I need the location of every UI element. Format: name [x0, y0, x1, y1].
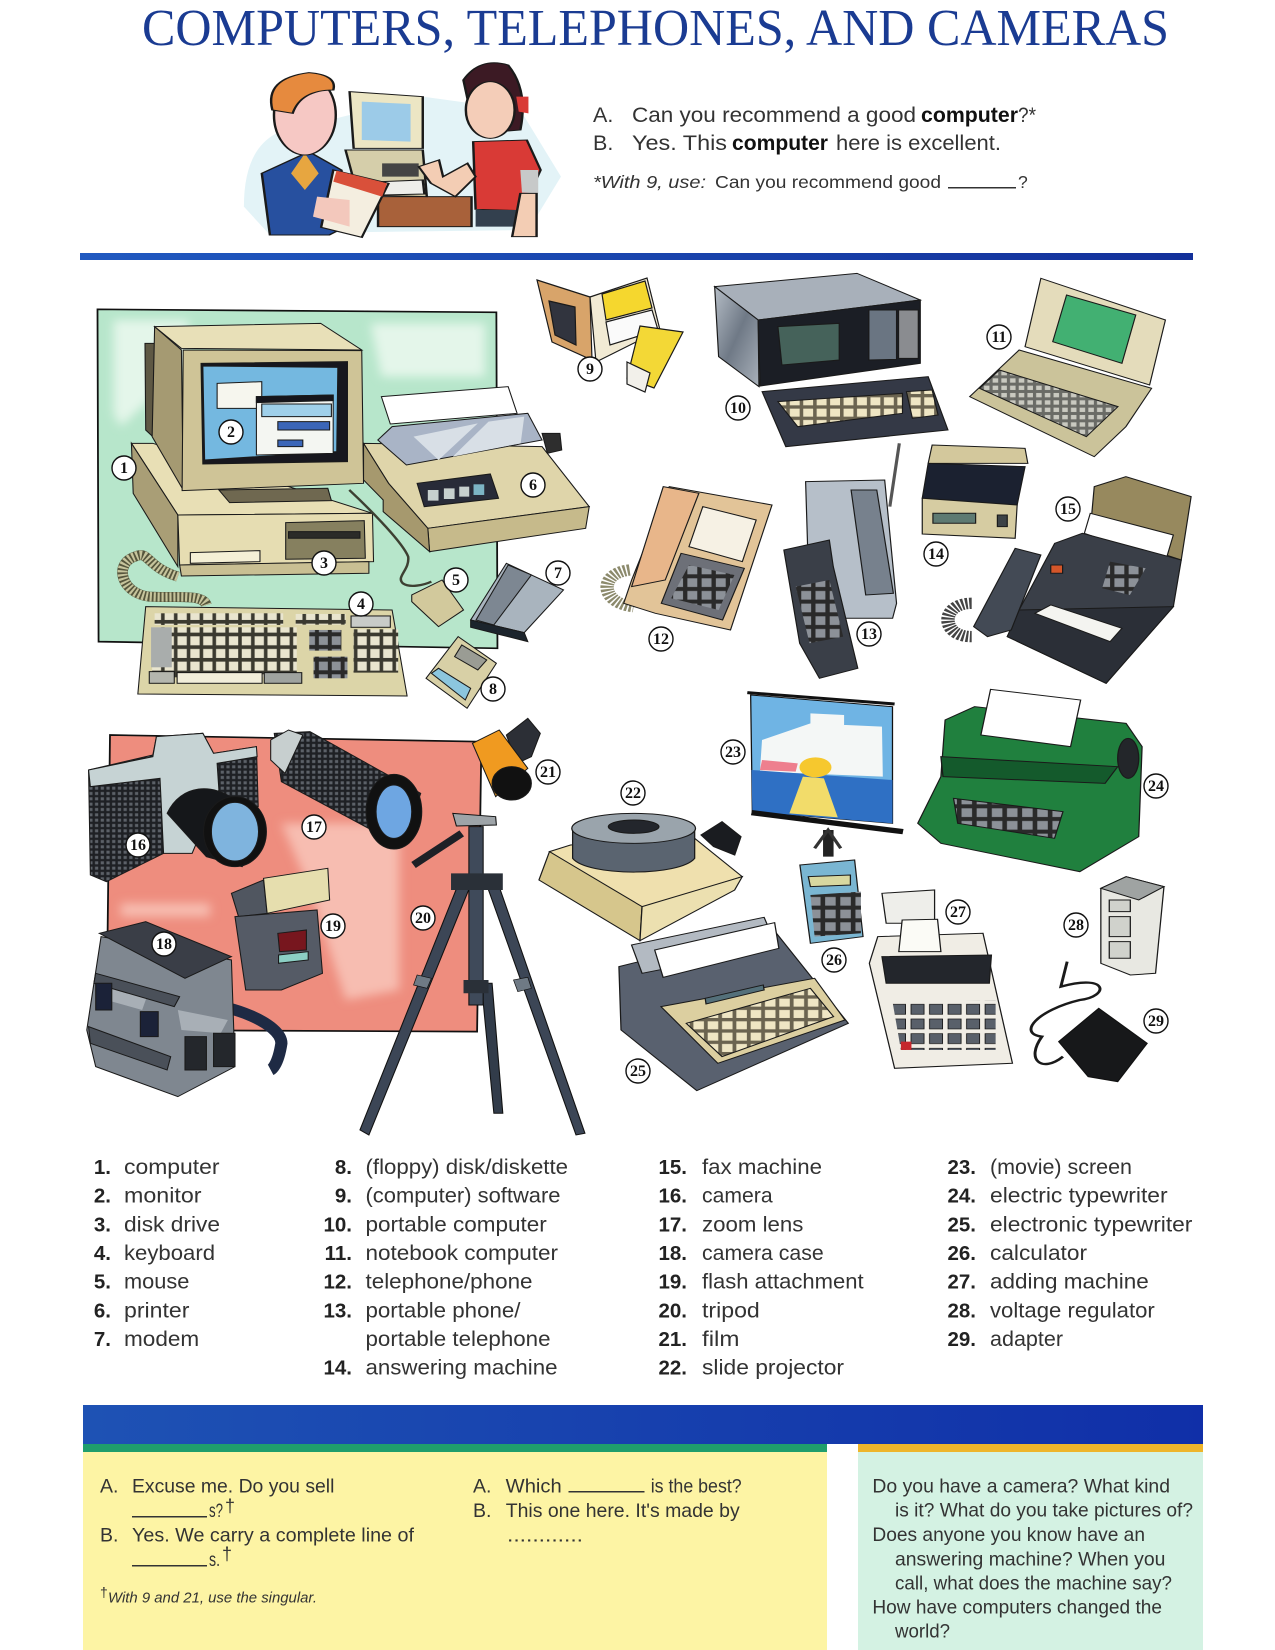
vocabulary list column 2: 9.: [335, 1185, 352, 1208]
icon: answering machine: [922, 445, 1028, 538]
vocabulary list column 4: 23.: [948, 1156, 976, 1179]
line B: Yes. This: [632, 131, 727, 155]
line A: Can you recommend a good: [632, 103, 916, 127]
vocabulary list column 1: [94, 1155, 220, 1351]
item number markers: 5: [452, 572, 460, 589]
dialogue column 1: With 9 and 21, use the singular.: [108, 1590, 317, 1607]
icon: notebook computer: [970, 278, 1165, 457]
vocabulary list column 4: electronic typewriter: [990, 1212, 1192, 1236]
dialogue column 1: B.: [100, 1525, 118, 1547]
illustration: customer and salesperson at a computer: [244, 63, 561, 237]
question text: How have computers changed the: [872, 1596, 1162, 1618]
item number markers: 18: [156, 936, 172, 953]
icon: zoom lens: [271, 730, 422, 849]
vocabulary list column 3: fax machine: [702, 1155, 822, 1179]
icon: electric typewriter: [918, 689, 1142, 872]
item number markers: 3: [320, 555, 328, 572]
icon: telephone: [607, 487, 772, 630]
icon: portable phone: [784, 443, 899, 678]
vocabulary list column 2: (computer) software: [366, 1184, 560, 1208]
vocabulary list column 1: monitor: [124, 1184, 202, 1208]
item number markers: 11: [991, 329, 1007, 346]
icon: adapter: [1031, 962, 1147, 1082]
footnote: Can you recommend good: [715, 172, 941, 192]
dialogue column 1: [100, 1476, 415, 1607]
vocabulary list column 2: 10.: [324, 1213, 352, 1236]
dialogue column 1: †: [100, 1584, 108, 1600]
vocabulary list column 1: mouse: [124, 1270, 189, 1294]
vocabulary list column 3: camera: [702, 1184, 773, 1208]
vocabulary list column 2: 13.: [324, 1299, 352, 1322]
vocabulary list column 2: portable phone/: [366, 1298, 521, 1322]
question text: answering machine? When you: [895, 1548, 1165, 1570]
item number markers: 17: [306, 819, 322, 836]
dialogue column 2: is the best?: [651, 1476, 742, 1498]
vocabulary list column 3: 18.: [658, 1242, 687, 1265]
title: COMPUTERS, TELEPHONES, AND CAMERAS: [142, 0, 1169, 57]
vocabulary list column 4: calculator: [990, 1241, 1087, 1265]
vocabulary list column 2: 8.: [335, 1156, 352, 1179]
red backdrop: [106, 735, 481, 1032]
item number markers: 12: [653, 631, 669, 648]
vocabulary list column 2: 12.: [324, 1271, 352, 1294]
vocabulary list column 4: 27.: [948, 1271, 976, 1294]
vocabulary list column 3: 15.: [658, 1156, 687, 1179]
dialogue column 2: This one here. It's made by: [506, 1500, 740, 1522]
item number markers: 29: [1148, 1013, 1164, 1030]
question text: [872, 1476, 1193, 1642]
question text: world?: [894, 1620, 950, 1642]
item number markers: 8: [489, 681, 497, 698]
vocabulary list column 3: 17.: [658, 1213, 687, 1236]
panel: office machines: [539, 689, 1164, 1091]
vocabulary list column 2: notebook computer: [366, 1241, 558, 1265]
vocabulary list column 3: 20.: [658, 1299, 687, 1322]
item number markers: 16: [130, 837, 146, 854]
vocabulary list column 2: (floppy) disk/diskette: [366, 1155, 568, 1179]
vocabulary list column 2: portable telephone: [366, 1327, 550, 1351]
vocabulary list column 3: camera case: [702, 1241, 824, 1265]
icon: computer base unit: [131, 443, 374, 576]
footnote: ?: [1018, 172, 1028, 192]
vocabulary list column 1: 7.: [94, 1328, 111, 1351]
vocabulary list column 1: disk drive: [124, 1212, 220, 1236]
vocabulary list column 1: 3.: [94, 1213, 111, 1236]
item number markers: 6: [529, 477, 537, 494]
item number markers: 25: [630, 1063, 646, 1080]
item number markers: 2: [227, 424, 235, 441]
item number markers: 28: [1068, 917, 1084, 934]
dialogue column 1: †: [222, 1544, 232, 1564]
icon: movie screen: [747, 693, 903, 857]
icon: mouse with cable: [349, 490, 464, 627]
top blue rule: [80, 253, 1193, 260]
icon: film: [472, 718, 540, 800]
footnote: *With 9, use:: [593, 172, 706, 192]
icon: portable computer: [715, 273, 948, 447]
dialogue column 1: A.: [100, 1476, 118, 1498]
vocabulary list column 2: 14.: [324, 1357, 352, 1380]
dialogue column 1: s?: [209, 1500, 223, 1522]
item number markers: [112, 325, 1168, 1083]
vocabulary list column 3: 19.: [658, 1271, 687, 1294]
item number markers: 7: [554, 565, 562, 582]
icon: slide projector: [539, 813, 742, 941]
icon: fax machine: [948, 477, 1191, 683]
vocabulary list column 3: slide projector: [702, 1356, 844, 1380]
dialogue: recommending a computer: [593, 103, 1037, 192]
vocabulary list column 3: zoom lens: [702, 1212, 803, 1236]
item number markers: 10: [730, 400, 746, 417]
vocabulary list column 3: 16.: [658, 1185, 687, 1208]
item number markers: 19: [325, 918, 341, 935]
green strip: [83, 1444, 827, 1452]
vocabulary list column 1: 2.: [94, 1185, 111, 1208]
line B: computer: [732, 131, 829, 155]
item number markers: 1: [120, 460, 128, 477]
item number markers: 24: [1148, 778, 1164, 795]
panel: computers and telephones: [607, 273, 1191, 683]
vocabulary list column 2: telephone/phone: [366, 1270, 532, 1294]
dialogue column 2: [473, 1476, 742, 1547]
vocabulary list column 3: 22.: [658, 1357, 687, 1380]
item number markers: 23: [725, 744, 741, 761]
vocabulary list column 2: 11.: [325, 1242, 352, 1265]
icon: flash attachment: [231, 868, 330, 990]
vocabulary list column 4: (movie) screen: [990, 1155, 1132, 1179]
question text: Does anyone you know have an: [872, 1524, 1145, 1546]
vocabulary list column 4: 25.: [948, 1213, 976, 1236]
icon: camera case: [87, 922, 281, 1097]
question text: is it? What do you take pictures of?: [895, 1500, 1193, 1522]
vocabulary list column 4: [948, 1155, 1192, 1351]
orange strip: [858, 1444, 1203, 1452]
item number markers: 21: [540, 764, 556, 781]
icon: calculator: [800, 860, 863, 943]
vocabulary list column 1: printer: [124, 1298, 189, 1322]
vocabulary list column 4: 29.: [948, 1328, 976, 1351]
line B: here is excellent.: [836, 131, 1001, 155]
icon: floppy disk: [426, 637, 496, 708]
vocabulary list column 4: 28.: [948, 1299, 976, 1322]
vocabulary list column 4: 26.: [948, 1242, 976, 1265]
dialogue column 2: B.: [473, 1500, 491, 1522]
icon: keyboard: [138, 607, 407, 696]
item number markers: 13: [861, 626, 877, 643]
icon: coiled keyboard cord: [123, 555, 206, 605]
dialogue column 1: Excuse me. Do you sell: [132, 1476, 334, 1498]
vocabulary list column 3: 21.: [658, 1328, 687, 1351]
vocabulary list column 4: voltage regulator: [990, 1298, 1155, 1322]
item number markers: 20: [415, 910, 431, 927]
item number markers: 4: [357, 596, 365, 613]
vocabulary list column 1: 4.: [94, 1242, 111, 1265]
item number markers: 22: [625, 785, 641, 802]
vocabulary list column 3: [658, 1155, 864, 1380]
icon: adding machine: [869, 890, 1012, 1068]
vocabulary list column 3: tripod: [702, 1298, 760, 1322]
icon: voltage regulator: [1101, 877, 1164, 975]
item number markers: 26: [826, 952, 842, 969]
vocabulary list column 4: adding machine: [990, 1270, 1149, 1294]
dialogue column 1: s.: [209, 1549, 220, 1571]
dialogue column 1: Yes. We carry a complete line of: [132, 1525, 415, 1547]
line A: ?*: [1018, 103, 1037, 127]
item number markers: 9: [586, 361, 594, 378]
vocabulary list column 4: adapter: [990, 1327, 1063, 1351]
panel: discussion questions: [858, 1444, 1203, 1650]
vocabulary list column 2: answering machine: [366, 1356, 558, 1380]
vocabulary list column 1: computer: [124, 1155, 220, 1179]
panel: practice dialogue: [83, 1444, 827, 1650]
green backdrop: [97, 309, 497, 648]
vocabulary list column 4: 24.: [948, 1185, 976, 1208]
icon: camera: [89, 733, 266, 882]
question text: call, what does the machine say?: [895, 1572, 1172, 1594]
icon: monitor: [145, 323, 364, 503]
panel: computer equipment on green background: [97, 309, 589, 708]
dialogue column 2: A.: [473, 1476, 491, 1498]
line A: A.: [593, 103, 613, 127]
vocabulary list column 3: film: [702, 1327, 740, 1351]
icon: modem: [471, 563, 564, 642]
icon: printer: [364, 387, 589, 552]
icon: tripod: [360, 813, 585, 1135]
vocabulary list column 3: flash attachment: [702, 1270, 864, 1294]
dialogue column 2: ............: [507, 1525, 583, 1547]
vocabulary list column 1: modem: [124, 1327, 199, 1351]
line A: computer: [921, 103, 1019, 127]
vocabulary list column 2: [324, 1155, 568, 1380]
dialogue column 2: Which: [506, 1476, 562, 1498]
bottom blue banner: [83, 1405, 1203, 1444]
vocabulary list column 4: electric typewriter: [990, 1184, 1168, 1208]
line B: B.: [593, 131, 613, 155]
dialogue column 1: †: [225, 1496, 235, 1516]
vocabulary list column 1: 5.: [94, 1271, 111, 1294]
vocabulary list column 1: keyboard: [124, 1241, 215, 1265]
line A: [593, 103, 1037, 127]
question text: Do you have a camera? What kind: [872, 1476, 1170, 1498]
item number markers: 14: [928, 546, 944, 563]
vocabulary list column 2: portable computer: [366, 1212, 547, 1236]
icon: computer software binder and disk: [537, 278, 683, 392]
item number markers: 27: [950, 904, 966, 921]
footnote: [593, 172, 1028, 192]
vocabulary list column 1: 6.: [94, 1299, 111, 1322]
line B: [593, 131, 1001, 155]
item number markers: 15: [1060, 501, 1076, 518]
panel: cameras on red background: [87, 718, 585, 1135]
icon: electronic typewriter: [619, 917, 848, 1091]
vocabulary list column 1: 1.: [94, 1156, 111, 1179]
